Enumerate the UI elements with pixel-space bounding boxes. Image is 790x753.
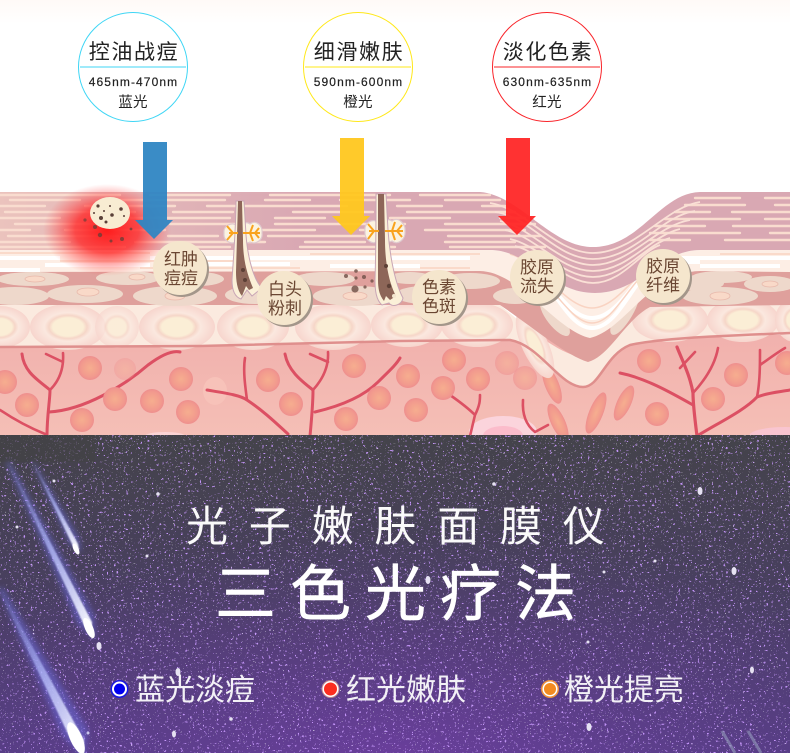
badge: 白头粉刺 — [257, 271, 313, 327]
circle: 淡化色素 red light: 淡化色素 — [503, 41, 593, 64]
badge: 胶原纤维: 纤维 — [646, 276, 680, 295]
hair follicle left — [224, 201, 262, 299]
meteor 3 — [0, 588, 88, 753]
badge: 红肿痘痘: 红肿 — [164, 250, 198, 269]
badge: 白头粉刺: 粉刺 — [268, 299, 302, 318]
badge: 红肿痘痘: 痘痘 — [164, 269, 198, 288]
pimple with dark spots — [83, 197, 132, 242]
stratum corneum layer — [0, 190, 790, 295]
circle: 淡化色素 red light — [492, 12, 602, 122]
fat cells — [0, 348, 790, 443]
faint meteors — [722, 731, 761, 753]
arrow: blue light — [135, 142, 173, 239]
title: 三色光疗法: 三色光疗法 — [215, 560, 590, 628]
circle: 控油战痘 blue light: 控油战痘 — [89, 41, 179, 64]
background — [0, 0, 790, 435]
badge: 色素色斑: 色斑 — [422, 297, 456, 316]
badge: 色素色斑 — [412, 270, 468, 326]
top tint band — [0, 0, 790, 24]
circle: 控油战痘 blue light — [78, 12, 188, 122]
badge: 胶原流失: 流失 — [520, 277, 554, 296]
circle: 淡化色素 red light: 630nm-635nm — [503, 75, 592, 89]
red inflammation glow — [43, 184, 171, 276]
cell layer — [0, 298, 790, 387]
badge: 胶原纤维: 胶原 — [646, 257, 680, 276]
arrow: yellow light — [332, 138, 370, 235]
meteor 1 — [32, 462, 82, 555]
meteor 2 — [6, 462, 97, 640]
granular layer — [0, 270, 790, 362]
badge: 胶原纤维 — [636, 249, 692, 305]
circle: 淡化色素 red light: 红光 — [532, 94, 562, 111]
dermis layer — [0, 335, 790, 435]
legend: 红光嫩肤: 红光嫩肤 — [346, 674, 466, 707]
dark corner band — [0, 435, 95, 462]
circle: 细滑嫩肤 orange light: 橙光 — [343, 94, 373, 111]
badge: 白头粉刺: 白头 — [268, 280, 302, 299]
hair follicle right — [365, 194, 405, 305]
pale stratum layer — [0, 250, 790, 338]
title: 光子嫩肤面膜仪: 光子嫩肤面膜仪 — [186, 503, 626, 550]
circle: 控油战痘 blue light: 465nm-470nm — [89, 75, 178, 89]
panel: skin cross-section illustration — [0, 184, 790, 448]
badge: 胶原流失 — [510, 250, 566, 306]
badge: 胶原流失: 胶原 — [520, 258, 554, 277]
legend: 橙光提亮: 橙光提亮 — [564, 674, 684, 707]
large stars — [16, 480, 754, 738]
pigment spots — [344, 269, 374, 293]
circle: 细滑嫩肤 orange light: 590nm-600nm — [314, 75, 403, 89]
panel: starry night background — [0, 435, 790, 753]
circle: 细滑嫩肤 orange light: 细滑嫩肤 — [314, 41, 404, 64]
circle: 控油战痘 blue light: 蓝光 — [118, 94, 148, 111]
circle: 细滑嫩肤 orange light — [304, 12, 412, 122]
legend: 蓝光淡痘: 蓝光淡痘 — [135, 674, 255, 707]
badge: 红肿痘痘 — [153, 241, 209, 297]
badge: 色素色斑: 色素 — [422, 278, 456, 297]
blood vessels — [0, 347, 790, 436]
arrow: red light — [498, 138, 536, 235]
